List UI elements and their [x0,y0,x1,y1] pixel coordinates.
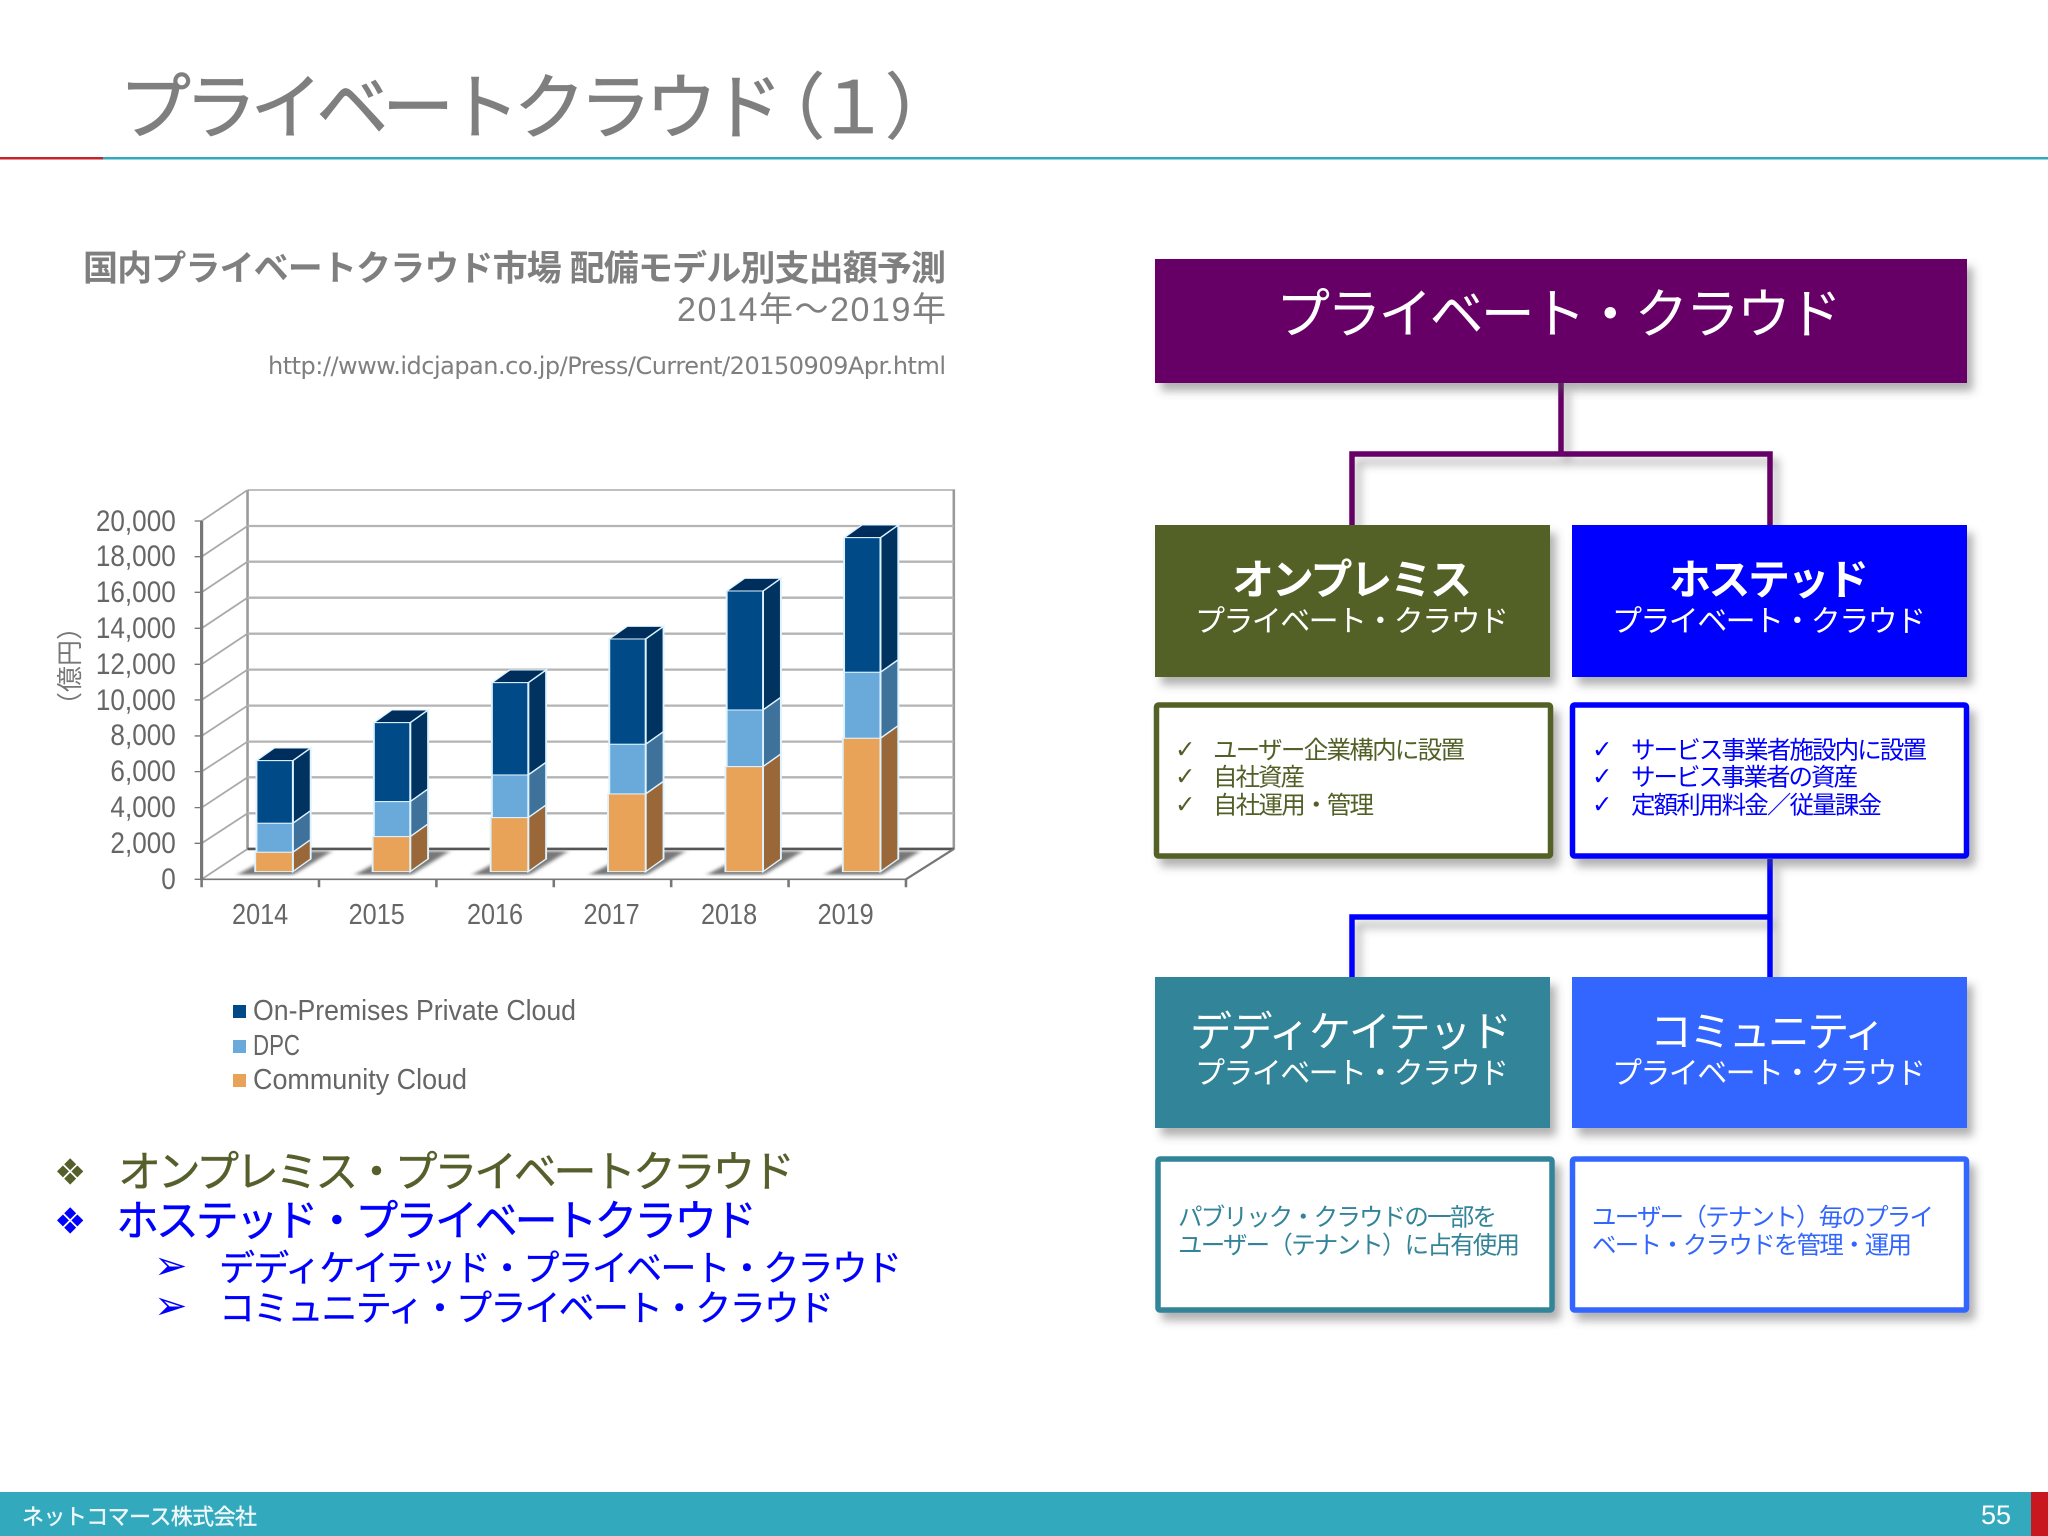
bar 2018 [725,578,781,872]
chart subheading: 2014年～2019年 [677,291,946,329]
box: on-premises [1155,525,1550,677]
box: on-premises details: 自社運用・管理 [1213,792,1374,820]
box: community: コミュニティ [1650,1008,1886,1056]
box: hosted: ホステッド [1669,556,1869,604]
x axis labels: 2016 [467,897,523,931]
box: community [1572,977,1967,1128]
y axis labels: 20,000 [96,504,176,538]
bullet list: ➢ [154,1243,188,1289]
bullet list: ➢ [154,1283,188,1329]
chart heading: 国内プライベートクラウド市場 配備モデル別支出額予測 [83,248,946,288]
box: on-premises: オンプレミス [1232,556,1472,604]
bullet list: デディケイテッド・プライベート・クラウド [219,1248,902,1288]
box: dedicated [1155,977,1550,1128]
bullet list [54,1149,902,1329]
box: community details [1572,1159,1966,1310]
box: hosted details: ✓ [1592,762,1613,790]
bullet list: オンプレミス・プライベートクラウド [118,1149,795,1197]
y axis labels: 12,000 [96,647,176,681]
bar 2015 [373,710,428,872]
box: community details: ユーザー（テナント）毎のプライ [1592,1204,1934,1232]
box: on-premises details: 自社資産 [1213,764,1305,792]
bars [237,525,920,875]
bullet list: ホステッド・プライベートクラウド [116,1198,757,1246]
box: on-premises details: ✓ [1175,762,1196,790]
box: dedicated details: ユーザー（テナント）に占有使用 [1178,1232,1520,1260]
connector: private cloud to on-premises and hosted [1352,383,1770,525]
box: hosted details: ✓ [1592,734,1613,764]
connector: hosted details to dedicated and community [1352,859,1770,977]
box: dedicated: デディケイテッド [1190,1008,1512,1056]
box: on-premises: プライベート・クラウド [1195,606,1509,638]
footer bar [0,1492,2048,1536]
title: （１） [753,69,957,149]
y axis labels: 16,000 [96,575,176,609]
bar 2016 [491,670,546,872]
box: hosted details: 定額利用料金／従量課金 [1631,792,1882,820]
x axis labels: 2018 [701,897,757,931]
company name: ネットコマース株式会社 [22,1504,257,1530]
bullet list: コミュニティ・プライベート・クラウド [219,1288,834,1328]
y axis labels: 14,000 [96,611,176,645]
y axis labels [96,504,176,896]
page number: 55 [1981,1500,2011,1530]
box: hosted details: ✓ [1592,790,1613,818]
source url: http://www.idcjapan.co.jp/Press/Current/20150909Apr.html [268,352,946,380]
y axis labels: 6,000 [110,754,176,788]
y axis labels: 4,000 [110,790,176,824]
bar chart [55,490,954,1096]
chart frame and gridlines [195,490,954,887]
box: hosted details [1572,705,1966,856]
x axis labels: 2017 [584,897,640,931]
legend: Community Cloud [253,1064,467,1096]
y axis labels: 10,000 [96,683,176,717]
title: プライベートクラウド [119,69,783,149]
box: hosted [1572,525,1967,677]
bar 2017 [608,626,664,872]
x axis labels: 2014 [232,897,288,931]
bar 2019 [843,525,898,872]
box: private cloud [1155,259,1967,383]
header rule [0,157,2048,160]
y axis labels: 8,000 [110,718,176,752]
box: private cloud: プライベート・クラウド [1276,285,1842,345]
box: on-premises details: ✓ [1175,734,1196,764]
bar 2014 [255,748,311,872]
bullet list: ❖ [54,1202,86,1242]
box: hosted: プライベート・クラウド [1612,606,1926,638]
x axis labels [232,897,874,931]
legend: On-Premises Private Cloud [253,995,576,1027]
y axis labels: 0 [161,862,176,896]
box: dedicated details [1158,1159,1552,1310]
legend: DPC [253,1030,300,1062]
legend [233,995,576,1096]
box: on-premises details: ユーザー企業構内に設置 [1213,736,1465,764]
box: on-premises details [1156,705,1550,856]
box: community: プライベート・クラウド [1612,1058,1926,1090]
box: hosted details: サービス事業者の資産 [1631,764,1858,792]
y axis title: （億円） [55,614,85,718]
bullet list: ❖ [54,1152,86,1194]
box: community details: ベート・クラウドを管理・運用 [1592,1232,1912,1260]
x axis labels: 2015 [349,897,405,931]
x axis labels: 2019 [818,897,874,931]
box: dedicated details: パブリック・クラウドの一部を [1178,1204,1497,1232]
box: hosted details: サービス事業者施設内に設置 [1631,736,1927,764]
box: on-premises details: ✓ [1175,790,1196,818]
box: dedicated: プライベート・クラウド [1195,1058,1509,1090]
y axis labels: 2,000 [110,826,176,860]
chart heading [83,248,946,380]
y axis labels: 18,000 [96,539,176,573]
